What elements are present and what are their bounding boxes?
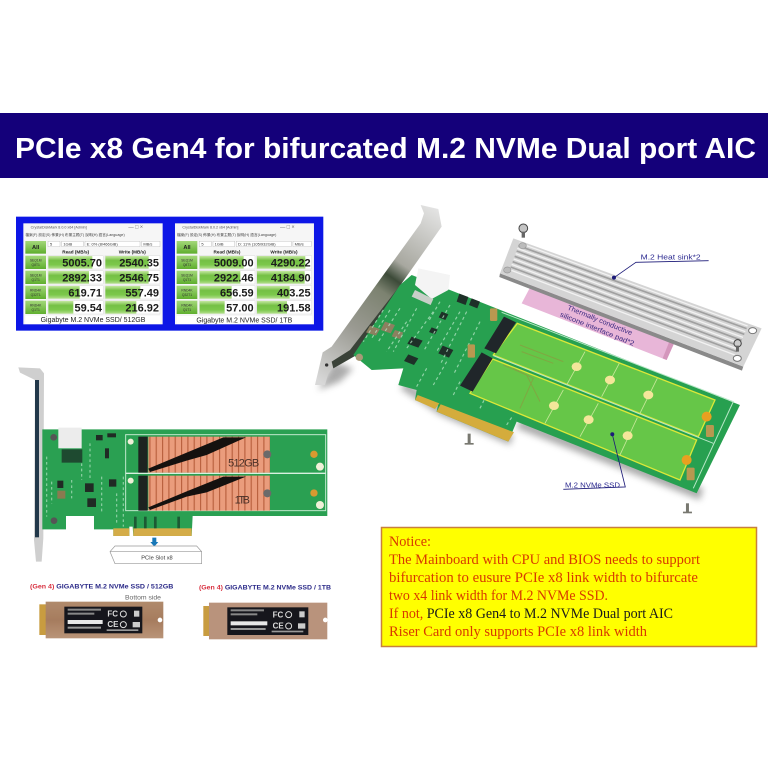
notice box: The Mainboard with CPU and BIOS needs to support bbox=[389, 552, 700, 568]
benchmark window: 512GB: 59.54 bbox=[74, 302, 103, 314]
benchmark window: 512GB: Q8T1 bbox=[32, 263, 40, 267]
icon: metal bracket bbox=[315, 205, 442, 385]
SSD heat spreader: 512GB bbox=[138, 437, 271, 473]
benchmark window: 1TB: 1GiB bbox=[215, 242, 224, 247]
SSD photo: 512GB bbox=[39, 602, 163, 638]
benchmark window: 512GB: 2892.33 bbox=[62, 272, 102, 284]
benchmark window: 512GB: Q1T1 bbox=[32, 278, 40, 282]
front view: card with SSDs installed bbox=[18, 367, 327, 564]
benchmark window: 512GB: 5005.70 bbox=[62, 257, 102, 269]
heat sink bbox=[499, 224, 762, 371]
callout: M.2 NVMe SSD: M.2 NVMe SSD bbox=[565, 482, 620, 489]
benchmark window: 512GB: RND4K bbox=[30, 303, 42, 307]
SSD photo: 1TB: CE bbox=[273, 621, 284, 630]
SSD 1TB caption: (Gen 4) GIGABYTE M.2 NVMe SSD / 1TB bbox=[199, 584, 331, 591]
SSD heat spreader: 1TB bbox=[138, 476, 271, 511]
SSD 512GB caption: (Gen 4) GIGABYTE M.2 NVMe SSD / 512GB bbox=[30, 583, 174, 590]
benchmark window: 1TB: 2922.46 bbox=[214, 272, 254, 284]
benchmark window: 512GB: 216.92 bbox=[125, 302, 159, 314]
benchmark window: 1TB: 4184.90 bbox=[271, 272, 311, 284]
benchmark window: 512GB: E: 0% (8/466GiB) bbox=[87, 242, 118, 247]
PCIe slot diagram bbox=[110, 546, 202, 564]
SSD heat spreader: 512GB: 512GB bbox=[228, 458, 259, 470]
SSD heat spreader: 1TB: 1TB bbox=[235, 494, 250, 506]
notice box bbox=[382, 528, 756, 646]
benchmark window: 1TB: Write (MB/s) bbox=[270, 249, 298, 254]
benchmark window: 1TB: RND4K bbox=[181, 303, 193, 307]
benchmark window: 1TB: SEQ1M bbox=[181, 273, 193, 277]
benchmark window: 512GB: SEQ1M bbox=[30, 258, 42, 262]
SSD photo: 1TB: FC bbox=[273, 610, 284, 619]
benchmark window: 1TB: Q1T1 bbox=[183, 278, 191, 282]
benchmark window: 512GB: 619.71 bbox=[68, 287, 102, 299]
bottom side note: Bottom side bbox=[125, 594, 161, 601]
benchmark window: 1TB: RND4K bbox=[181, 288, 193, 292]
thermal interface pad: silicone interface pad*2 bbox=[559, 311, 635, 348]
SSD photo: 1TB bbox=[203, 603, 328, 639]
benchmark window: 512GB: 2540.35 bbox=[119, 257, 159, 269]
callout: heat sink: M.2 Heat sink*2 bbox=[641, 254, 701, 261]
benchmark window: 1TB: — □ × bbox=[280, 225, 295, 231]
benchmark window: 512GB: MB/s bbox=[143, 242, 152, 247]
title banner: PCIe x8 Gen4 for bifurcated M.2 NVMe Dual port AIC bbox=[15, 133, 756, 165]
benchmark window: 1TB: 656.59 bbox=[220, 287, 254, 299]
icon: insertion arrow bbox=[150, 538, 158, 547]
benchmark window: 512GB bbox=[23, 223, 163, 324]
notice box: If not, PCIe x8 Gen4 to M.2 NVMe Dual port AIC bbox=[389, 606, 673, 622]
benchmark window: 1TB: 403.25 bbox=[277, 287, 311, 299]
benchmark window: 512GB: Q32T1 bbox=[31, 293, 41, 297]
benchmark window: 1TB: 4290.22 bbox=[271, 257, 311, 269]
benchmark window: 1TB: 57.00 bbox=[226, 302, 254, 314]
benchmark window: 512GB: SEQ1M bbox=[30, 273, 42, 277]
title banner bbox=[0, 113, 768, 178]
benchmark window: 512GB: Read (MB/s) bbox=[62, 249, 90, 254]
benchmark window: 512GB: Q1T1 bbox=[32, 308, 40, 312]
benchmark window: 1TB: CrystalDiskMark 8.0.2 x64 [Admin] bbox=[182, 226, 238, 230]
benchmark window: 1TB: MB/s bbox=[295, 242, 304, 247]
benchmark window: 1TB: Gigabyte M.2 NVMe SSD/ 1TB bbox=[196, 317, 293, 324]
benchmark window: 1TB: Q1T1 bbox=[183, 308, 191, 312]
PCIe slot diagram: PCIe Slot x8 bbox=[141, 555, 173, 561]
benchmark window: 512GB: CrystalDiskMark 8.0.0 x64 [Admin] bbox=[31, 226, 87, 230]
metal bracket bbox=[18, 367, 44, 562]
benchmark window: 1TB: 檔案(F) 設定(S) 佈景(H) 布景主題(T) 說明(H) 語言(Language) bbox=[177, 232, 276, 237]
benchmark window: 512GB: 2546.75 bbox=[119, 272, 159, 284]
notice box: Notice: bbox=[389, 534, 431, 550]
drop shadow bbox=[318, 362, 703, 500]
thermal interface pad: Thermally conductive bbox=[566, 305, 633, 337]
benchmark window: 512GB: — □ × bbox=[128, 225, 143, 231]
benchmark window: 512GB: 5 bbox=[50, 242, 53, 247]
SSD photos bbox=[30, 583, 331, 639]
benchmark window: 512GB: 1GiB bbox=[63, 242, 73, 247]
benchmark window: 1TB bbox=[175, 223, 314, 324]
thermal interface pad bbox=[522, 275, 675, 360]
benchmark window: 512GB: RND4K bbox=[30, 288, 42, 292]
exploded view: card with heat sink and thermal pad bbox=[315, 205, 762, 513]
benchmark window: 512GB: 檔案(F) 設定(S) 佈景(H) 布景主題(T) 說明(H) 語言(Language) bbox=[25, 232, 125, 237]
benchmark window: 1TB: 191.58 bbox=[277, 302, 311, 314]
notice box: Riser Card only supports PCIe x8 link width bbox=[389, 624, 647, 640]
benchmark window: 1TB: 5 bbox=[201, 242, 204, 247]
benchmark window: 1TB: All bbox=[183, 245, 191, 251]
panel: CrystalDiskMark benchmark results bbox=[16, 217, 323, 331]
notice box: bifurcation to eusure PCIe x8 link width to bifurcate bbox=[389, 570, 698, 586]
benchmark window: 512GB: 557.49 bbox=[125, 287, 159, 299]
benchmark window: 1TB: 5009.00 bbox=[214, 257, 254, 269]
benchmark window: 512GB: Gigabyte M.2 NVMe SSD/ 512GB bbox=[41, 317, 146, 324]
benchmark window: 512GB: All bbox=[32, 245, 40, 251]
SSD photo: 512GB: FC bbox=[107, 610, 118, 619]
benchmark window: 1TB: Q8T1 bbox=[183, 263, 191, 267]
SSD photo: 512GB: CE bbox=[107, 620, 119, 629]
benchmark window: 1TB: Read (MB/s) bbox=[214, 249, 241, 254]
notice box: two x4 link width for M.2 NVMe SSD. bbox=[389, 588, 608, 604]
benchmark window: 1TB: D: 11% (105/932GiB) bbox=[238, 242, 276, 247]
circuit board bbox=[353, 268, 740, 493]
benchmark window: 1TB: Q32T1 bbox=[182, 293, 192, 297]
benchmark window: 1TB: SEQ1M bbox=[181, 258, 193, 262]
callout: M.2 NVMe SSD bbox=[563, 432, 625, 489]
circuit board bbox=[42, 428, 327, 536]
callout: heat sink bbox=[612, 254, 709, 280]
icon: standoff screws bbox=[465, 434, 692, 513]
benchmark window: 512GB: Write (MB/s) bbox=[119, 249, 146, 254]
